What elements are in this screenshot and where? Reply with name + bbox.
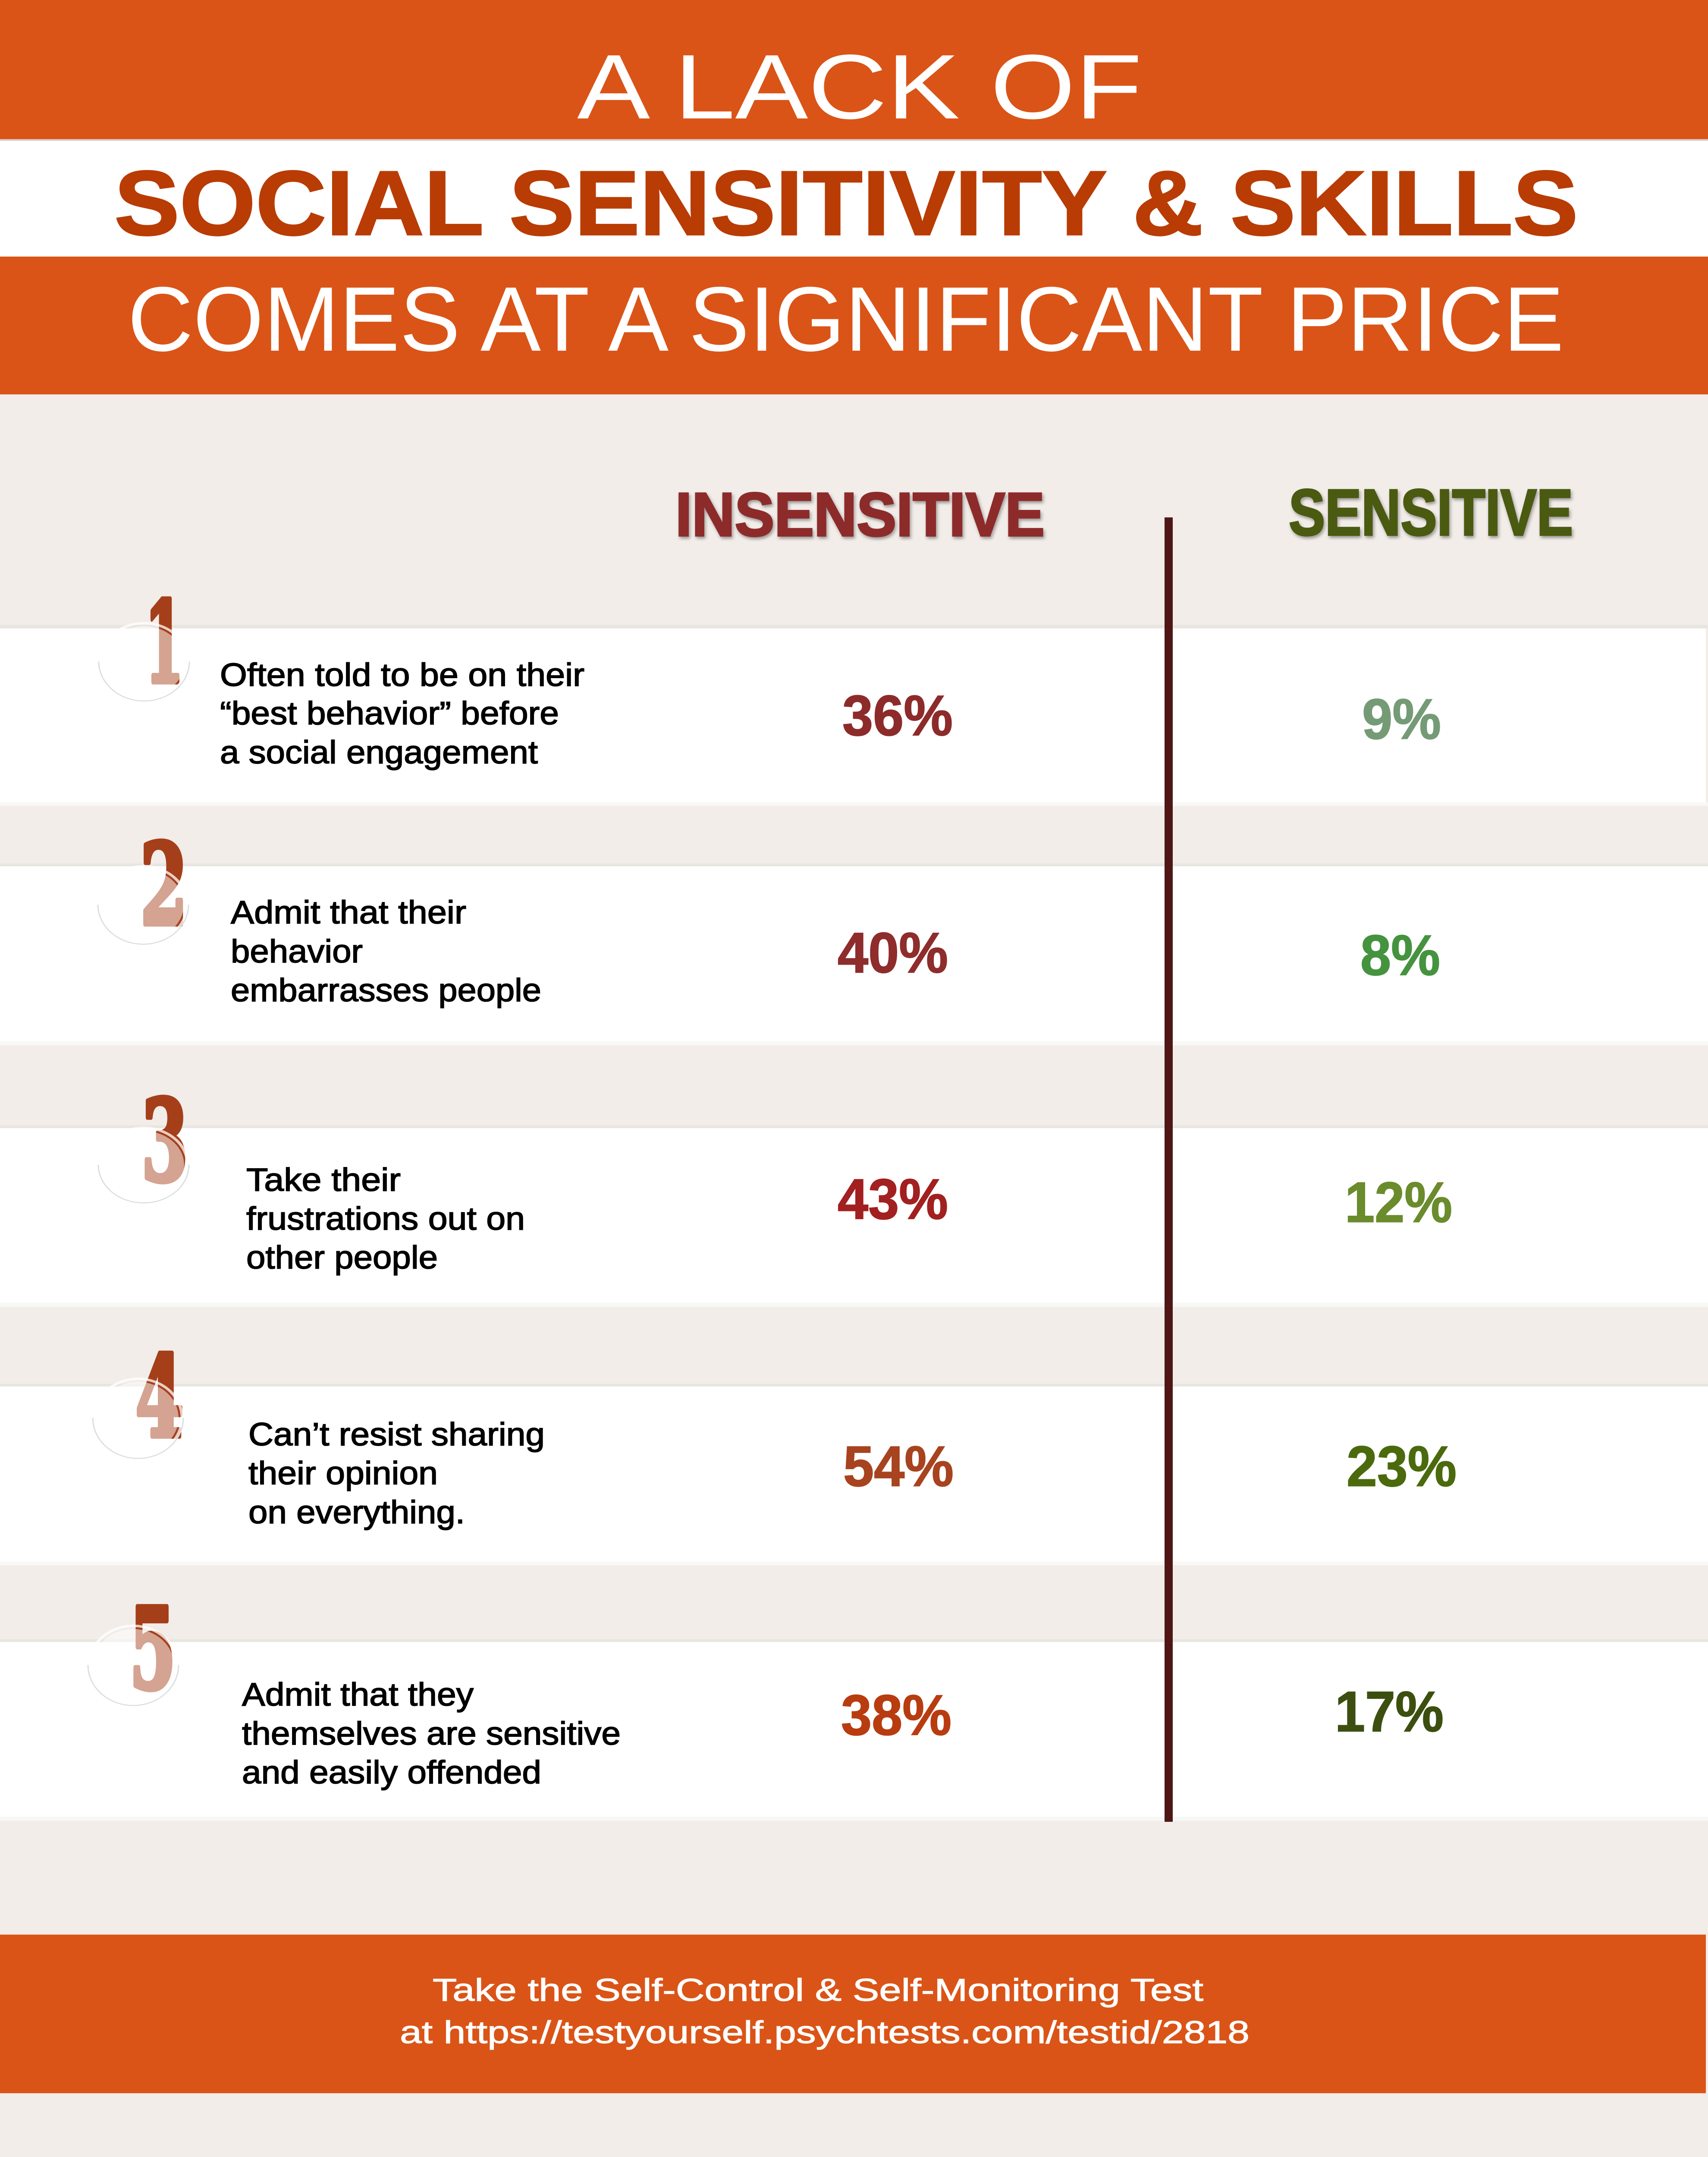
stat: row 2 sensitive: 8% — [1360, 924, 1440, 987]
row 3 band — [0, 1126, 1708, 1307]
row 3 text: Take their — [246, 1162, 401, 1198]
number 5: 5 — [129, 1583, 176, 1715]
row 3 text: other people — [246, 1239, 438, 1275]
row 2 text — [231, 894, 541, 1008]
row 5 text: Admit that they — [242, 1676, 474, 1713]
row 2 text: Admit that their — [231, 894, 466, 931]
footer call to action — [0, 1934, 1706, 2093]
row 5 text: themselves are sensitive — [242, 1715, 621, 1751]
column heading: sensitive: SENSITIVE — [1289, 475, 1573, 549]
row 4 band — [0, 1384, 1708, 1565]
row 3 text: frustrations out on — [246, 1200, 525, 1237]
number 1 — [99, 577, 189, 709]
number 4 — [93, 1331, 184, 1463]
column heading: insensitive: INSENSITIVE — [675, 480, 1045, 549]
stat: row 4 insensitive: 54% — [843, 1434, 954, 1498]
row 1 band — [0, 625, 1708, 806]
vertical divider — [1165, 517, 1173, 1822]
row 1 text: “best behavior” before — [220, 695, 559, 731]
row 5 text — [242, 1676, 621, 1790]
title line 1: A LACK OF — [577, 36, 1142, 138]
stat: row 3 sensitive: 12% — [1345, 1171, 1452, 1234]
stat: row 1 sensitive: 9% — [1362, 687, 1441, 751]
header banner — [0, 0, 1708, 394]
footer call to action: Take the Self-Control & Self-Monitoring Test — [433, 1973, 1203, 2008]
row 4 text: their opinion — [248, 1455, 438, 1491]
number 5 — [88, 1583, 179, 1715]
row 5 text: and easily offended — [242, 1754, 541, 1790]
number 2 — [98, 819, 188, 951]
stat: row 3 insensitive: 43% — [838, 1167, 948, 1231]
infographic canvas: 3 — [141, 1075, 188, 1207]
number 4: 4 — [135, 1331, 184, 1463]
row 1 text — [220, 657, 584, 770]
number 3 — [98, 1075, 189, 1207]
stat: row 5 insensitive: 38% — [841, 1683, 951, 1747]
row 2 text: behavior — [231, 933, 363, 969]
row 2 band — [0, 864, 1708, 1045]
row 2 text: embarrasses people — [231, 972, 541, 1008]
row 3 text — [246, 1162, 525, 1275]
row 4 text — [248, 1416, 545, 1530]
stat: row 5 sensitive: 17% — [1335, 1680, 1444, 1744]
stat: row 4 sensitive: 23% — [1347, 1434, 1457, 1498]
footer call to action: at https://testyourself.psychtests.com/testid/2818 — [400, 2015, 1250, 2050]
stat: row 2 insensitive: 40% — [838, 921, 948, 985]
number 2: 2 — [140, 819, 188, 951]
stat: row 1 insensitive: 36% — [842, 684, 953, 748]
row 5 band — [0, 1639, 1708, 1821]
row 4 text: Can’t resist sharing — [248, 1416, 545, 1453]
row 1 text: a social engagement — [220, 734, 538, 770]
row 4 text: on everything. — [248, 1494, 465, 1530]
row 1 text: Often told to be on their — [220, 657, 584, 693]
infographic canvas: 1 — [145, 577, 184, 709]
